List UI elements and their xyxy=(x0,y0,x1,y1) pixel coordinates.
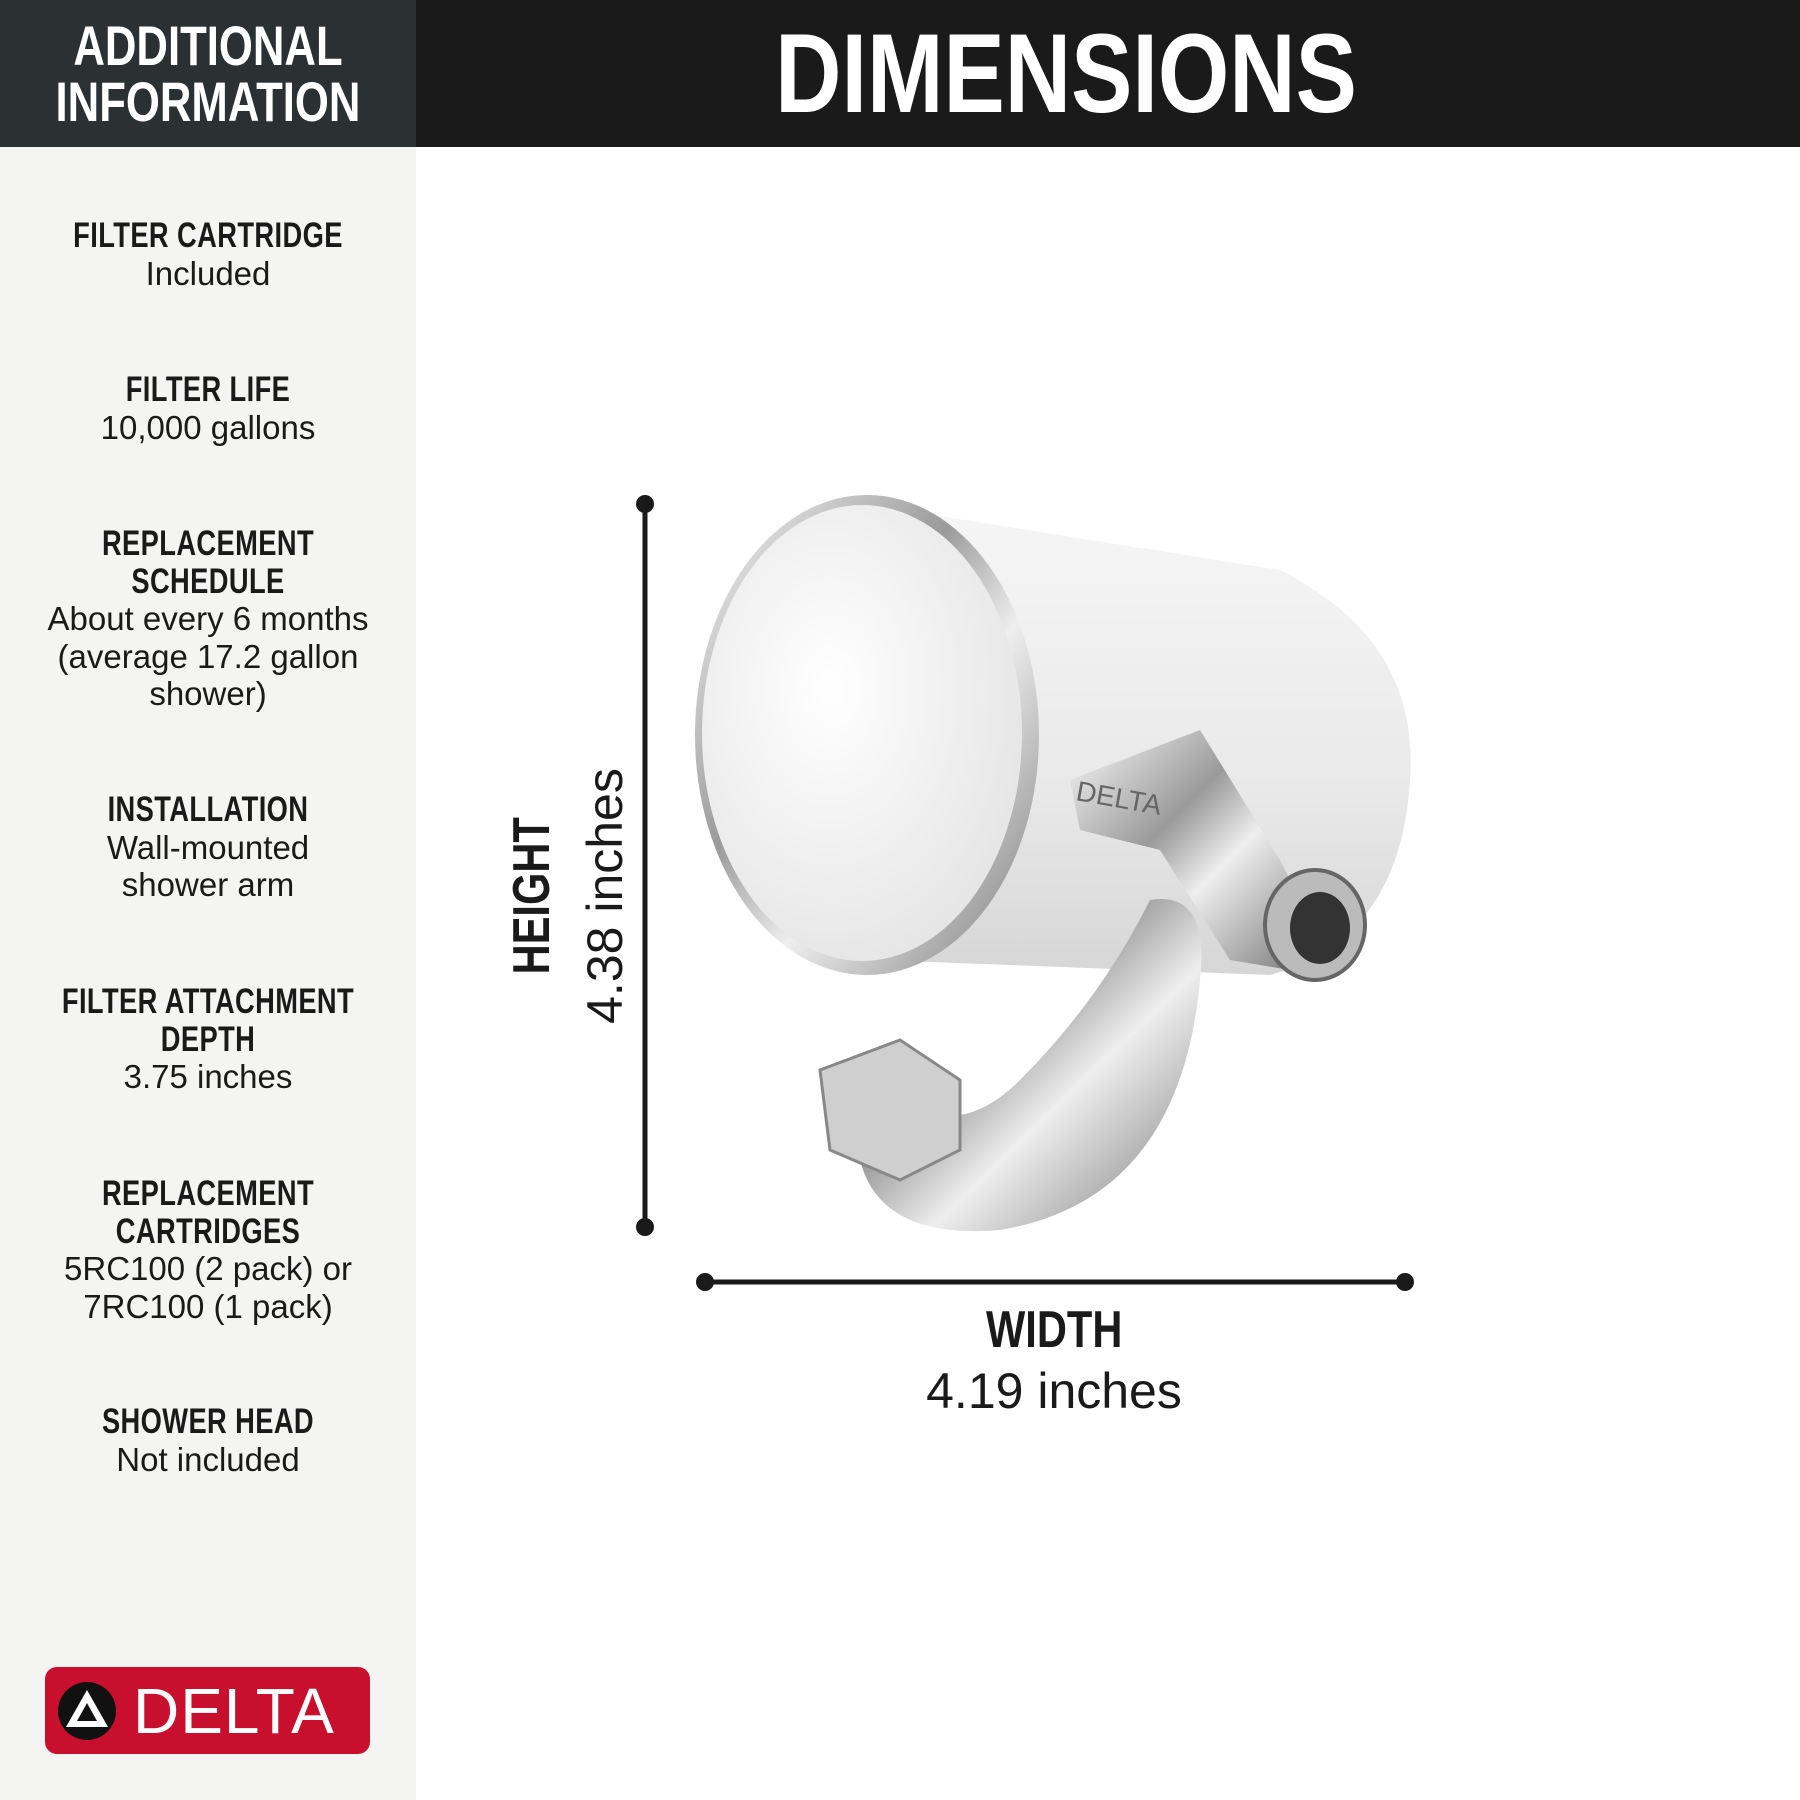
item: installation xyxy=(107,790,309,903)
height label xyxy=(503,768,633,1024)
item: replacement cartridges: REPLACEMENT xyxy=(102,1174,314,1213)
item: shower head xyxy=(102,1402,314,1478)
item: filter attachment depth xyxy=(62,982,354,1095)
item: replacement cartridges: CARTRIDGES xyxy=(116,1212,300,1250)
item: installation: INSTALLATION xyxy=(108,790,308,829)
item: installation: Wall-mounted xyxy=(107,828,309,866)
item: filter life xyxy=(101,370,315,446)
chrome face ring xyxy=(695,495,1039,975)
product illustration: shower filter xyxy=(695,495,1410,1232)
text: 4.38 inches xyxy=(577,768,633,1024)
width label xyxy=(926,1301,1182,1419)
cylinder body xyxy=(870,505,1411,975)
item: filter cartridge: Included xyxy=(146,254,270,292)
item: replacement cartridges: 5RC100 (2 pack) or xyxy=(64,1250,352,1287)
item: replacement cartridges: 7RC100 (1 pack) xyxy=(83,1288,333,1324)
height dimension arrow xyxy=(636,495,654,1236)
icon: delta triangle xyxy=(58,1682,116,1740)
item: replacement schedule: SCHEDULE xyxy=(131,562,285,600)
title xyxy=(416,0,1800,147)
item: replacement schedule: shower) xyxy=(149,675,267,712)
product illustration: shower filter: DELTA xyxy=(1074,775,1164,821)
pipe elbow xyxy=(860,899,1201,1231)
sidebar heading: INFORMATION xyxy=(56,70,360,133)
item: filter attachment depth: DEPTH xyxy=(161,1020,255,1058)
title: DIMENSIONS xyxy=(775,11,1357,136)
logo: Delta xyxy=(45,1667,370,1754)
width label: 4.19 inches xyxy=(926,1363,1182,1419)
item: filter attachment depth: 3.75 inches xyxy=(124,1058,292,1095)
panel: additional information sidebar xyxy=(0,0,416,1800)
item: shower head: SHOWER HEAD xyxy=(102,1402,314,1441)
logo: Delta: DELTA xyxy=(133,1675,335,1747)
item: filter life: 10,000 gallons xyxy=(101,408,315,446)
sidebar heading xyxy=(0,0,416,147)
width dimension arrow xyxy=(696,1273,1414,1291)
item: replacement schedule xyxy=(47,524,368,712)
item: replacement schedule: About every 6 months xyxy=(47,600,368,637)
item: filter life: FILTER LIFE xyxy=(126,370,290,409)
text: HEIGHT xyxy=(503,817,561,975)
item: filter attachment depth: FILTER ATTACHMENT xyxy=(62,982,354,1021)
sidebar heading: ADDITIONAL xyxy=(73,14,343,77)
outlet arm xyxy=(1070,730,1310,970)
item: replacement schedule: (average 17.2 gallon xyxy=(58,638,358,674)
hex nut xyxy=(820,1040,960,1180)
item: replacement schedule: REPLACEMENT xyxy=(102,524,314,563)
item: filter cartridge: FILTER CARTRIDGE xyxy=(73,216,343,255)
width label: WIDTH xyxy=(986,1301,1122,1359)
item: shower head: Not included xyxy=(116,1440,300,1478)
item: installation: shower arm xyxy=(122,866,294,903)
item: filter cartridge xyxy=(73,216,343,292)
item: replacement cartridges xyxy=(64,1174,352,1325)
